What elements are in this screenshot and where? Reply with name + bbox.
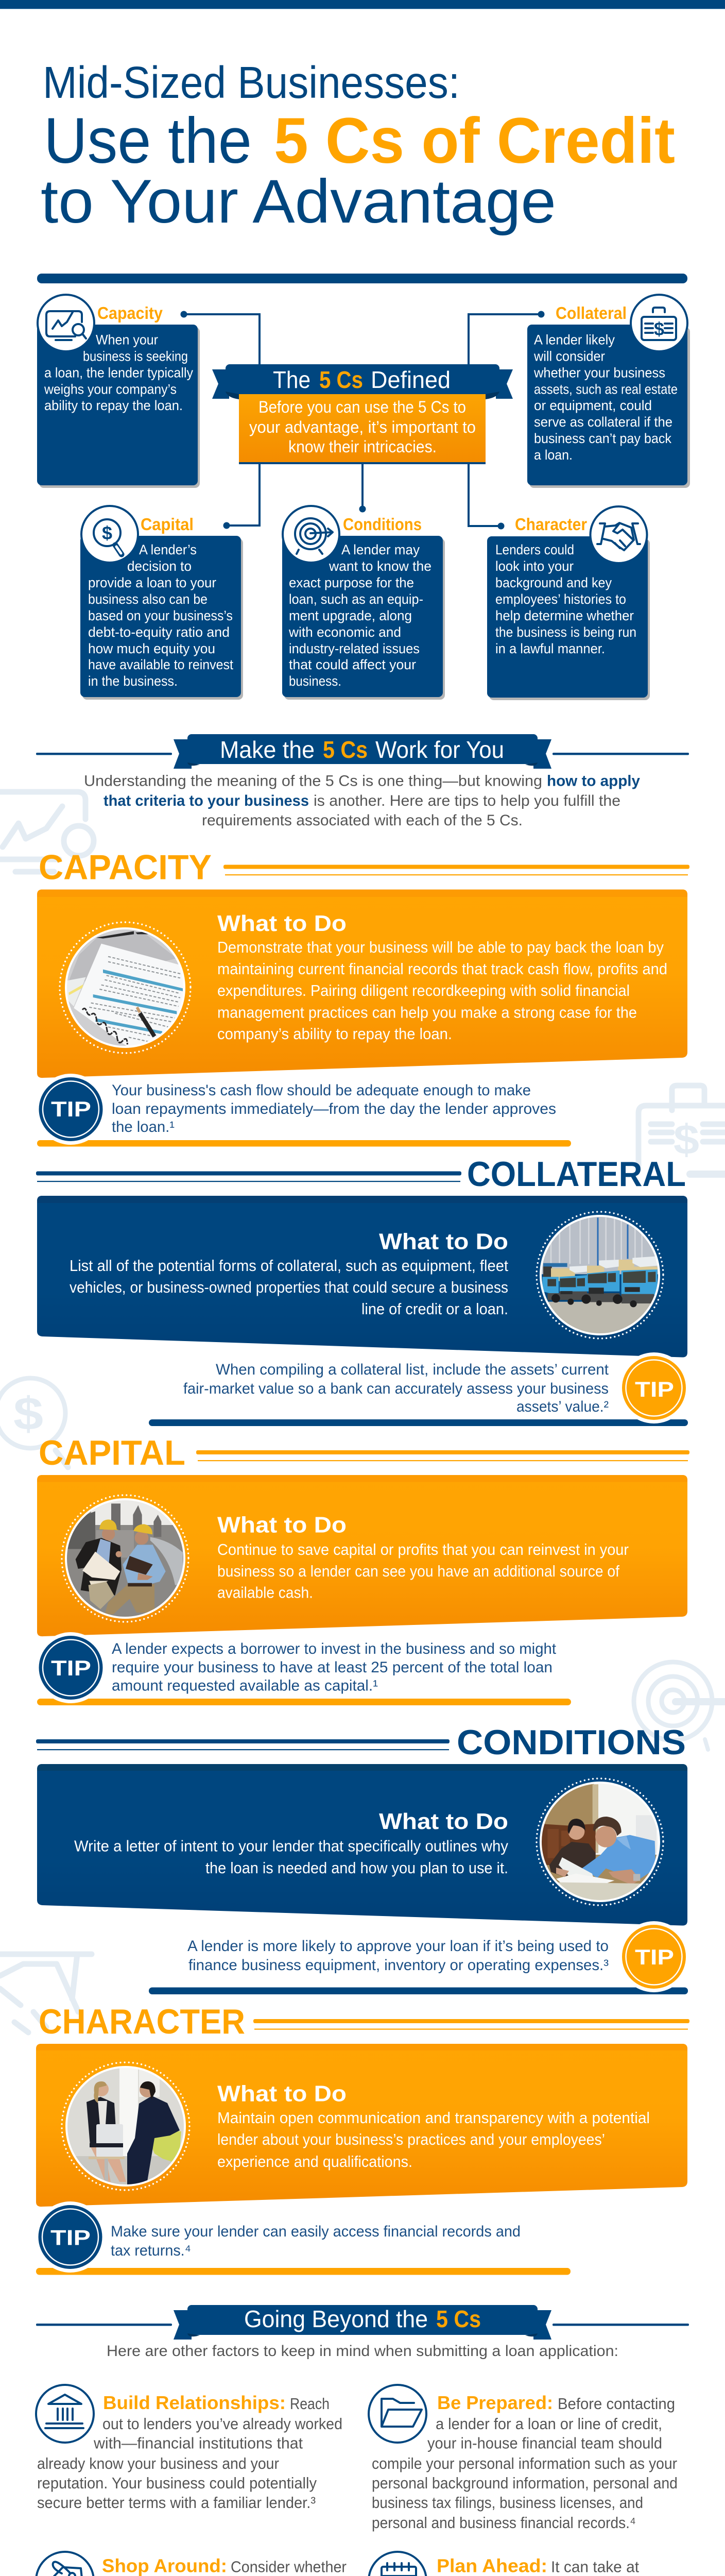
heading: character: CHARACTER (39, 2002, 245, 2041)
banner: going beyond the 5 Cs: 5 Cs (436, 2306, 481, 2332)
banner: going beyond the 5 Cs: Going Beyond the (244, 2306, 428, 2332)
text: Continue to save capital or profits that you can reinvest in your (217, 1540, 629, 1558)
watermark icon: briefcase (638, 1086, 725, 1174)
heading: capital (39, 1433, 689, 1472)
panel: character definition: the business is being run (495, 624, 636, 640)
panel: character definition: Character (515, 515, 587, 534)
banner: the 5 Cs defined: The (273, 366, 310, 393)
panel: capacity definition (37, 295, 200, 488)
panel: collateral definition: business can’t pay back (534, 431, 671, 446)
tip block: be prepared: personal and business financial records.⁴ (372, 2514, 636, 2532)
icon: folder (369, 2385, 426, 2443)
tip block: shop around: Consider whether (231, 2557, 347, 2576)
panel: capacity definition: weighs your company’s (44, 381, 177, 397)
icon: chart monitor (38, 295, 94, 351)
panel: character what to do (36, 2044, 687, 2207)
tip: conditions: TIP (635, 1945, 674, 1969)
banner: the 5 Cs defined: 5 Cs (319, 366, 363, 393)
tip: character: Make sure your lender can easily access financial records and (111, 2223, 521, 2240)
panel: capital definition: business also can be (88, 591, 208, 607)
text: maintaining current financial records that track cash flow, profits and (217, 960, 667, 978)
tip block: plan ahead (369, 2552, 646, 2576)
text: lender about your business’s practices and your employees’ (217, 2130, 605, 2148)
panel: collateral definition: whether your business (533, 365, 665, 380)
heading: conditions: CONDITIONS (457, 1723, 686, 1762)
callout: orange intro box: Before you can use the 5 Cs to (258, 398, 466, 416)
tip: capacity (35, 1074, 571, 1147)
icon: dollar magnifier: $ (102, 522, 112, 544)
panel: capacity definition: ability to repay the loan. (44, 398, 183, 413)
tip: character: TIP (50, 2226, 91, 2249)
panel: character definition: background and key (495, 575, 612, 590)
icon: briefcase (631, 295, 687, 351)
photo: construction managers (61, 1494, 189, 1623)
panel: character definition: look into your (495, 558, 574, 574)
panel: collateral definition: Collateral (556, 303, 627, 323)
tip block: build relationships: already know your business and your (37, 2454, 279, 2472)
panel: conditions definition (282, 506, 445, 700)
panel: capital definition: how much equity you (88, 641, 215, 656)
tip block: build relationships: out to lenders you’ve already worked (102, 2415, 342, 2433)
heading: collateral: COLLATERAL (467, 1155, 686, 1194)
intro text: is another. Here are tips to help you fulfill the (314, 792, 620, 809)
icon: briefcase: $ (654, 318, 664, 340)
tip block: be prepared: Be Prepared: (437, 2392, 553, 2413)
watermark icon: monitor (0, 792, 94, 872)
tip: capital: amount requested available as capital.¹ (112, 1677, 378, 1694)
text: management practices can help you make a strong case for the (217, 1004, 637, 1021)
tip block: plan ahead: It can take at (551, 2557, 639, 2576)
callout: orange intro box: your advantage, it’s important to (249, 418, 476, 436)
banner: the 5 Cs defined: Defined (371, 366, 451, 393)
text: line of credit or a loan. (361, 1300, 508, 1318)
panel: capacity what to do (37, 889, 687, 1078)
tip: capital: TIP (51, 1656, 91, 1680)
tip: collateral: assets’ value.² (516, 1398, 609, 1415)
title (41, 58, 675, 236)
tip block: plan ahead: Plan Ahead: (437, 2555, 547, 2576)
tip: collateral: When compiling a collateral list, include the assets’ current (216, 1361, 609, 1378)
tip: collateral: TIP (635, 1377, 674, 1401)
tip block: be prepared (369, 2385, 678, 2532)
intro text: how to apply (547, 773, 640, 789)
title: Use the (44, 105, 252, 177)
intro text: requirements associated with each of the 5 Cs. (202, 812, 523, 829)
banner: the 5 Cs defined (212, 364, 513, 399)
panel: character definition: help determine whether (495, 608, 634, 623)
panel: conditions what to do (37, 1764, 687, 1926)
panel: collateral definition: assets, such as real estate (534, 381, 678, 397)
tip: capacity: loan repayments immediately—from the day the lender approves (112, 1100, 556, 1117)
tip: capital: A lender expects a borrower to invest in the business and so might (112, 1640, 557, 1657)
panel: conditions definition: ment upgrade, along (289, 608, 412, 623)
panel: conditions definition: A lender may (341, 542, 420, 557)
watermark icon: dollar magnifier: $ (13, 1388, 43, 1440)
banner: make the 5 Cs work for you: 5 Cs (323, 736, 368, 763)
tip block: build relationships: Build Relationships: (103, 2392, 286, 2413)
panel: character definition (487, 506, 650, 700)
heading: capacity: CAPACITY (39, 848, 212, 887)
icon: handshake (590, 506, 647, 563)
heading: character (39, 2002, 689, 2041)
panel: conditions definition: exact purpose for the (289, 575, 414, 590)
watermark icon: handshake (0, 1954, 92, 2032)
text: What to Do (217, 911, 347, 936)
panel: capital definition: debt-to-equity ratio and (88, 624, 230, 640)
title: 5 Cs of Credit (274, 105, 675, 177)
heading: capacity (39, 848, 689, 887)
panel: capital definition: have available to reinvest (88, 657, 233, 672)
icon: bank (36, 2385, 94, 2443)
text: List all of the potential forms of collateral, such as equipment, fleet (70, 1257, 508, 1275)
icon: price tag (36, 2552, 94, 2576)
subheading: other factors: Here are other factors to keep in mind when submitting a loan application: (107, 2343, 618, 2360)
panel: collateral definition (527, 295, 690, 488)
tip block: be prepared: your in-house financial team should (427, 2434, 662, 2452)
heading: conditions (36, 1723, 686, 1762)
panel: capital definition (80, 506, 243, 700)
tip: capacity: TIP (51, 1097, 91, 1121)
heading: collateral (36, 1155, 686, 1194)
tip: conditions: finance business equipment, inventory or operating expenses.³ (188, 1957, 609, 1974)
watermark icon: briefcase: $ (674, 1116, 699, 1163)
text: company’s ability to repay the loan. (217, 1025, 452, 1043)
photo: business meeting (62, 2062, 189, 2190)
tip block: build relationships: secure better terms with a familiar lender.³ (37, 2494, 316, 2512)
panel: collateral definition: a loan. (534, 447, 573, 463)
callout: orange intro box: know their intricacies. (288, 437, 437, 456)
text: available cash. (217, 1584, 313, 1601)
text: experience and qualifications. (217, 2153, 412, 2171)
tip block: shop around (36, 2552, 347, 2576)
tip block: build relationships: reputation. Your business could potentially (37, 2474, 317, 2492)
tip: conditions: A lender is more likely to approve your loan if it’s being used to (187, 1938, 609, 1955)
photo: fleet trucks (536, 1211, 664, 1340)
panel: capital definition: in the business. (88, 673, 178, 689)
tip block: be prepared: a lender for a loan or line of credit, (436, 2415, 662, 2433)
text: What to Do (217, 1513, 347, 1537)
tip block: shop around: Shop Around: (102, 2555, 227, 2576)
tip: capacity: Your business's cash flow should be adequate enough to make (112, 1082, 531, 1099)
panel: collateral definition: or equipment, could (534, 398, 652, 413)
panel: collateral definition: A lender likely (534, 332, 615, 347)
panel: collateral definition: serve as collateral if the (534, 414, 672, 430)
text: vehicles, or business-owned properties that could secure a business (70, 1278, 508, 1296)
heading: capital: CAPITAL (39, 1433, 185, 1472)
tip: character: tax returns.⁴ (111, 2242, 191, 2259)
panel: character definition: in a lawful manner. (495, 641, 605, 656)
intro text: Understanding the meaning of the 5 Cs is one thing—but knowing (84, 773, 542, 789)
title: to Your Advantage (41, 167, 556, 236)
tip block: be prepared: personal background information, personal and (372, 2474, 678, 2492)
panel: character definition: employees’ histories to (495, 591, 626, 607)
divider rule (37, 274, 687, 283)
tip block: build relationships (36, 2385, 342, 2512)
tip block: build relationships: Reach (290, 2395, 330, 2413)
panel: capital definition: provide a loan to your (88, 575, 216, 590)
connector lines (180, 311, 545, 530)
text: the loan is needed and how you plan to use it. (205, 1859, 508, 1877)
text: Write a letter of intent to your lender that specifically outlines why (74, 1837, 508, 1855)
tip block: build relationships: with—financial institutions that (93, 2434, 303, 2452)
text: What to Do (379, 1809, 508, 1834)
tip block: be prepared: compile your personal information such as your (372, 2454, 677, 2472)
panel: capacity definition: When your (96, 332, 158, 347)
panel: conditions definition: with economic and (288, 624, 401, 640)
banner: make the 5 Cs work for you: Make the (220, 736, 315, 763)
tip block: be prepared: Before contacting (558, 2395, 675, 2413)
panel: capital definition: decision to (127, 558, 192, 574)
tip: conditions (149, 1921, 689, 1994)
panel: capacity definition: business is seeking (83, 348, 188, 364)
panel: capacity definition: Capacity (97, 303, 163, 323)
callout: orange intro box (239, 394, 486, 464)
panel: collateral what to do (37, 1196, 687, 1358)
panel: conditions definition: that could affect your (289, 657, 416, 672)
watermark icon: target (634, 1662, 725, 1750)
tip: capacity: the loan.¹ (112, 1118, 175, 1136)
watermark icon: dollar magnifier (0, 1378, 68, 1467)
panel: capacity definition: a loan, the lender typically (44, 365, 193, 380)
tip: capital: require your business to have at least 25 percent of the total loan (112, 1659, 553, 1676)
text: expenditures. Pairing diligent recordkeeping with solid financial (217, 981, 630, 999)
banner: make the 5 Cs work for you (36, 734, 689, 769)
intro text: that criteria to your business (103, 792, 309, 809)
panel: conditions definition: loan, such as an equip- (289, 591, 423, 607)
tip: character (35, 2201, 571, 2275)
panel: capital definition: based on your business’s (88, 608, 233, 623)
tip block: be prepared: business tax filings, business licenses, and (372, 2494, 643, 2512)
text: What to Do (217, 2081, 347, 2106)
icon: calendar (369, 2552, 426, 2576)
top bar (0, 0, 725, 9)
panel: character definition: Lenders could (495, 542, 574, 557)
icon: target (283, 506, 339, 563)
text: Demonstrate that your business will be able to pay back the loan by (217, 938, 664, 956)
panel: conditions definition: want to know the (329, 558, 431, 574)
tip: collateral: fair-market value so a bank can accurately assess your business (183, 1380, 609, 1397)
photo: financial records (57, 917, 196, 1056)
panel: capital what to do (37, 1475, 687, 1636)
icon: dollar magnifier (81, 506, 138, 563)
panel: collateral definition: will consider (533, 348, 605, 364)
banner: going beyond the 5 Cs (36, 2305, 689, 2340)
panel: conditions definition: industry-related issues (289, 641, 420, 656)
panel: conditions definition: Conditions (343, 515, 422, 534)
panel: capital definition: A lender’s (139, 542, 197, 557)
text: business so a lender can see you have an additional source of (217, 1562, 619, 1580)
photo: couple reviewing documents (536, 1777, 664, 1906)
intro text (84, 773, 640, 829)
text: Maintain open communication and transparency with a potential (217, 2109, 650, 2127)
panel: capital definition: Capital (141, 515, 194, 534)
title: Mid-Sized Businesses: (43, 58, 460, 108)
panel: conditions definition: business. (289, 673, 341, 689)
text: What to Do (379, 1229, 508, 1254)
tip: capital (35, 1632, 571, 1705)
banner: make the 5 Cs work for you: Work for You (375, 736, 504, 763)
tip: collateral (149, 1352, 689, 1426)
